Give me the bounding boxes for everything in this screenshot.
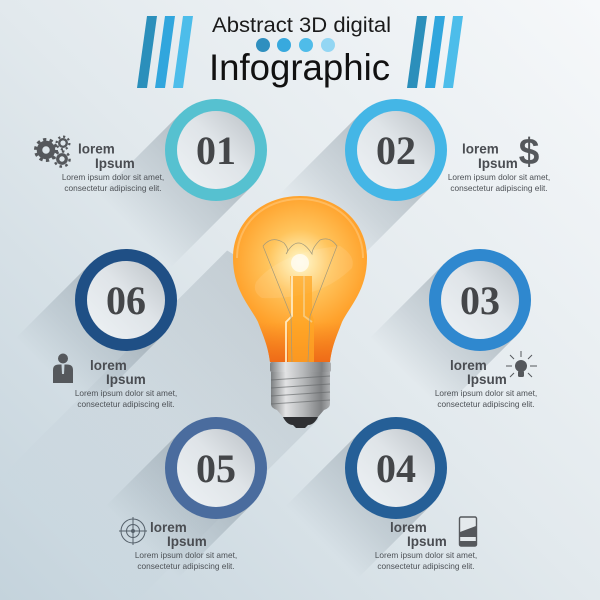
heading line one: Abstract 3D digital	[212, 13, 391, 37]
label 04: Ipsum	[407, 534, 447, 549]
shadow 04	[286, 432, 432, 578]
label 03: Ipsum	[467, 372, 507, 387]
shadow 06	[16, 264, 162, 410]
title block	[137, 13, 463, 88]
label 06	[75, 358, 177, 409]
label 02: lorem	[462, 142, 499, 156]
panel: 01	[36, 99, 267, 267]
label 06: consectetur adipiscing elit.	[77, 399, 175, 409]
panel: 04	[286, 417, 477, 578]
label 01	[62, 142, 164, 193]
label 01: Lorem ipsum dolor sit amet,	[62, 172, 164, 182]
icon: dollar: $	[519, 131, 540, 172]
bulb glass	[233, 196, 367, 362]
label 05: lorem	[150, 520, 187, 535]
icon: person	[53, 354, 73, 383]
shadow 05	[106, 432, 252, 578]
right stripes	[407, 16, 463, 88]
icon: gears	[36, 137, 70, 167]
screw base	[270, 362, 331, 428]
left stripes	[137, 16, 193, 88]
light bulb	[233, 196, 367, 428]
label 05: consectetur adipiscing elit.	[137, 561, 235, 571]
title dots	[256, 38, 335, 52]
panel: 05	[106, 417, 267, 578]
icon: phone	[460, 517, 476, 546]
panel: 02	[279, 99, 550, 267]
label 02: Ipsum	[478, 156, 518, 171]
number 02: 02	[376, 128, 416, 173]
label 05	[135, 520, 237, 571]
number 01: 01	[196, 128, 236, 173]
label 02	[448, 142, 550, 193]
label 06: Ipsum	[106, 372, 146, 387]
label 03	[435, 358, 537, 409]
icon: target	[119, 517, 147, 545]
label 01: consectetur adipiscing elit.	[64, 183, 162, 193]
shadow 01	[99, 114, 252, 267]
shadow 03	[370, 264, 516, 410]
ring 01	[165, 99, 267, 201]
filament stem	[263, 239, 337, 362]
long shadow of light bulb	[1, 236, 371, 600]
label 04: Lorem ipsum dolor sit amet,	[375, 550, 477, 560]
label 02: consectetur adipiscing elit.	[450, 183, 548, 193]
label 06: Lorem ipsum dolor sit amet,	[75, 388, 177, 398]
heading line two: Infographic	[209, 46, 390, 88]
label 04	[375, 520, 477, 571]
label 06: lorem	[90, 358, 127, 373]
ring 05	[165, 417, 267, 519]
label 01: Ipsum	[95, 156, 135, 171]
number 05: 05	[196, 446, 236, 491]
icon: small bulb	[506, 351, 537, 377]
label 05: Ipsum	[167, 534, 207, 549]
label 02: Lorem ipsum dolor sit amet,	[448, 172, 550, 182]
panel: 03	[370, 249, 537, 410]
label 04: consectetur adipiscing elit.	[377, 561, 475, 571]
label 04: lorem	[390, 520, 427, 535]
shadow 02	[279, 114, 432, 267]
label 05: Lorem ipsum dolor sit amet,	[135, 550, 237, 560]
label 03: consectetur adipiscing elit.	[437, 399, 535, 409]
ring 04	[345, 417, 447, 519]
ring 02	[345, 99, 447, 201]
number 03: 03	[460, 278, 500, 323]
number 04: 04	[376, 446, 416, 491]
number 06: 06	[106, 278, 146, 323]
label 03: lorem	[450, 358, 487, 373]
label 01: lorem	[78, 142, 115, 156]
label 03: Lorem ipsum dolor sit amet,	[435, 388, 537, 398]
panel: 06	[16, 249, 177, 410]
ring 06	[75, 249, 177, 351]
ring 03	[429, 249, 531, 351]
